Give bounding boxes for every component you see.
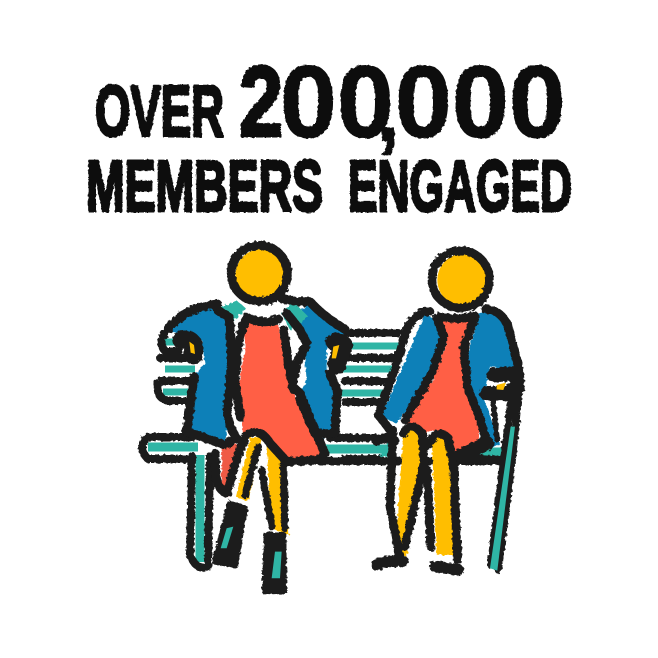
black outlines xyxy=(168,245,345,592)
number: 200,000: 2 xyxy=(239,46,283,158)
head xyxy=(437,253,491,307)
fills xyxy=(380,312,520,557)
number: 200,000 xyxy=(239,45,566,161)
bench black outlines xyxy=(142,333,500,568)
bench colour fills xyxy=(148,342,505,562)
number: 200,000: 0 xyxy=(280,45,337,159)
person right: blue cardigan and cane xyxy=(377,251,520,571)
fills xyxy=(167,301,348,535)
number: 200,000: 0 xyxy=(509,45,566,159)
number: 200,000: 0 xyxy=(337,45,394,159)
jacket hand and boot highlights xyxy=(189,342,339,578)
heading: over: OVER xyxy=(95,72,224,152)
bench xyxy=(142,333,505,568)
title xyxy=(86,45,572,227)
cane and hand highlights xyxy=(490,383,515,571)
black outlines xyxy=(377,251,519,570)
person left: jacket and red dress xyxy=(167,245,348,592)
number: 200,000: 0 xyxy=(395,45,452,159)
number: 200,000: , xyxy=(376,61,400,161)
head xyxy=(235,249,289,302)
number: 200,000: 0 xyxy=(452,45,509,159)
heading: members: MEMBERS xyxy=(86,147,323,227)
